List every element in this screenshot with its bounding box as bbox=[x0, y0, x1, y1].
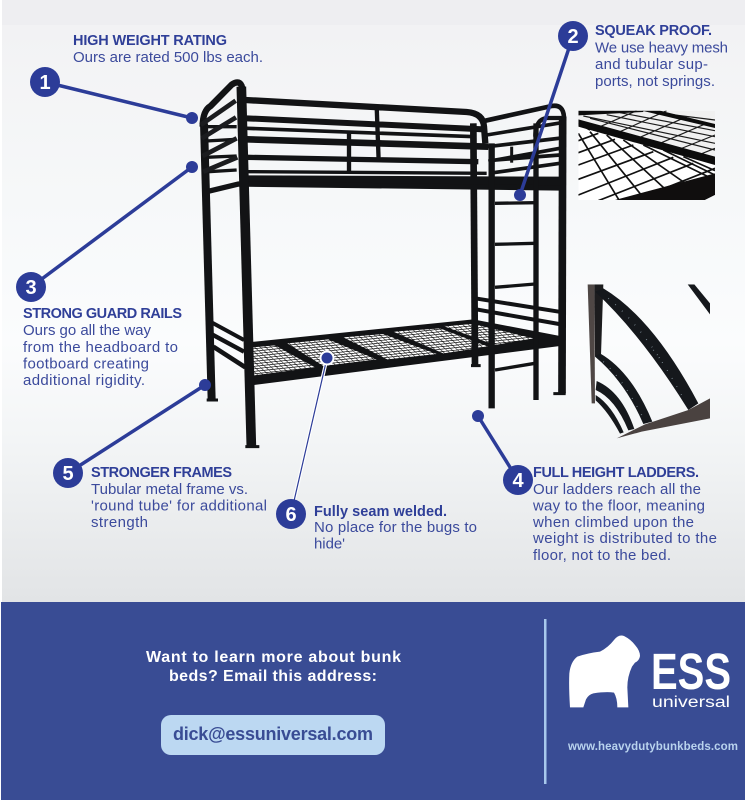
text: squeak proof: ports, not springs. bbox=[595, 73, 715, 90]
logo wordmark: universal bbox=[652, 694, 730, 711]
callout 5 leader line bbox=[68, 379, 211, 473]
text: fully seam welded: No place for the bugs to bbox=[314, 519, 477, 536]
email button: dick@essuniversal.com bbox=[173, 724, 373, 744]
text: squeak proof: and tubular sup- bbox=[595, 56, 708, 73]
text: strong guard rails: STRONG GUARD RAILS bbox=[23, 306, 182, 322]
icon: gorilla logo bbox=[569, 635, 640, 707]
badge 3: 3 bbox=[25, 277, 37, 299]
text: full height ladders bbox=[532, 465, 717, 564]
upper mesh bbox=[578, 111, 715, 156]
text: full height ladders: Our ladders reach all the bbox=[533, 481, 701, 498]
badge 3 bbox=[16, 272, 46, 302]
callout 5: stronger frames bbox=[53, 379, 267, 531]
badge 2: 2 bbox=[567, 26, 579, 48]
callout 2: squeak proof bbox=[514, 21, 728, 201]
badge 4: 4 bbox=[512, 470, 524, 492]
footer prompt: Want to learn more about bunk bbox=[146, 649, 401, 666]
text: fully seam welded: Fully seam welded. bbox=[314, 504, 447, 520]
text: high weight rating: Ours are rated 500 lbs each. bbox=[73, 49, 263, 66]
callout 4: full height ladders bbox=[472, 410, 717, 564]
logo wordmark: ESS bbox=[651, 643, 731, 700]
text: high weight rating: HIGH WEIGHT RATING bbox=[73, 33, 227, 49]
callout 2 leader line bbox=[514, 36, 573, 201]
text: full height ladders: weight is distributed to the bbox=[532, 530, 717, 547]
email button bbox=[161, 715, 385, 755]
guard rails bbox=[207, 100, 561, 192]
website url: www.heavydutybunkbeds.com bbox=[567, 741, 738, 753]
text: strong guard rails: from the headboard to bbox=[23, 339, 178, 356]
footer divider bbox=[544, 619, 546, 784]
badge 1: 1 bbox=[39, 72, 51, 94]
text: full height ladders: way to the floor, meaning bbox=[532, 498, 705, 514]
footboard bbox=[485, 106, 564, 173]
ladder bbox=[492, 123, 536, 408]
text: squeak proof bbox=[595, 23, 728, 90]
back posts bbox=[204, 117, 566, 447]
callout 6: fully seam welded bbox=[276, 350, 477, 552]
text: fully seam welded bbox=[314, 504, 477, 552]
badge 2 bbox=[558, 21, 588, 51]
text: stronger frames bbox=[91, 465, 267, 531]
footer panel bbox=[1, 602, 745, 800]
text: strong guard rails: additional rigidity. bbox=[23, 372, 145, 389]
text: stronger frames: strength bbox=[91, 514, 148, 531]
callout 4 leader line bbox=[472, 410, 518, 480]
bunk bed photo bbox=[201, 82, 566, 447]
dark crossbars bbox=[578, 119, 715, 165]
text: high weight rating bbox=[73, 33, 263, 66]
text: stronger frames: STRONGER FRAMES bbox=[91, 465, 232, 481]
lower bed mesh deck bbox=[208, 298, 560, 385]
badge 5 bbox=[53, 458, 83, 488]
text: strong guard rails: Ours go all the way bbox=[23, 322, 152, 339]
text: strong guard rails bbox=[23, 306, 182, 389]
text: strong guard rails: footboard creating bbox=[23, 356, 149, 372]
inset photo: weld detail bbox=[588, 284, 710, 438]
callout 1: high weight rating bbox=[30, 33, 263, 124]
text: full height ladders: when climbed upon the bbox=[532, 514, 694, 531]
badge 6 bbox=[276, 499, 306, 529]
text: squeak proof: SQUEAK PROOF. bbox=[595, 23, 712, 39]
front mesh wires bbox=[578, 123, 715, 202]
callout 6 leader line bbox=[291, 350, 334, 514]
headboard bbox=[201, 82, 243, 172]
callout 3: strong guard rails bbox=[16, 161, 198, 389]
footer prompt: beds? Email this address: bbox=[169, 668, 377, 685]
text: stronger frames: Tubular metal frame vs. bbox=[91, 481, 248, 498]
text: full height ladders: floor, not to the bed. bbox=[533, 547, 671, 564]
badge 1 bbox=[30, 67, 60, 97]
callout 3 leader line bbox=[31, 161, 198, 287]
text: stronger frames: 'round tube' for additional bbox=[91, 498, 267, 514]
callout 1 leader line bbox=[45, 82, 198, 124]
text: squeak proof: We use heavy mesh bbox=[595, 40, 728, 56]
footer prompt bbox=[146, 649, 401, 685]
inset photo: mesh detail bbox=[578, 111, 715, 202]
front post bbox=[241, 87, 251, 446]
badge 6: 6 bbox=[285, 504, 297, 526]
text: fully seam welded: hide' bbox=[314, 536, 345, 552]
text: full height ladders: FULL HEIGHT LADDERS. bbox=[533, 465, 699, 481]
badge 5: 5 bbox=[62, 463, 74, 485]
badge 4 bbox=[503, 465, 533, 495]
